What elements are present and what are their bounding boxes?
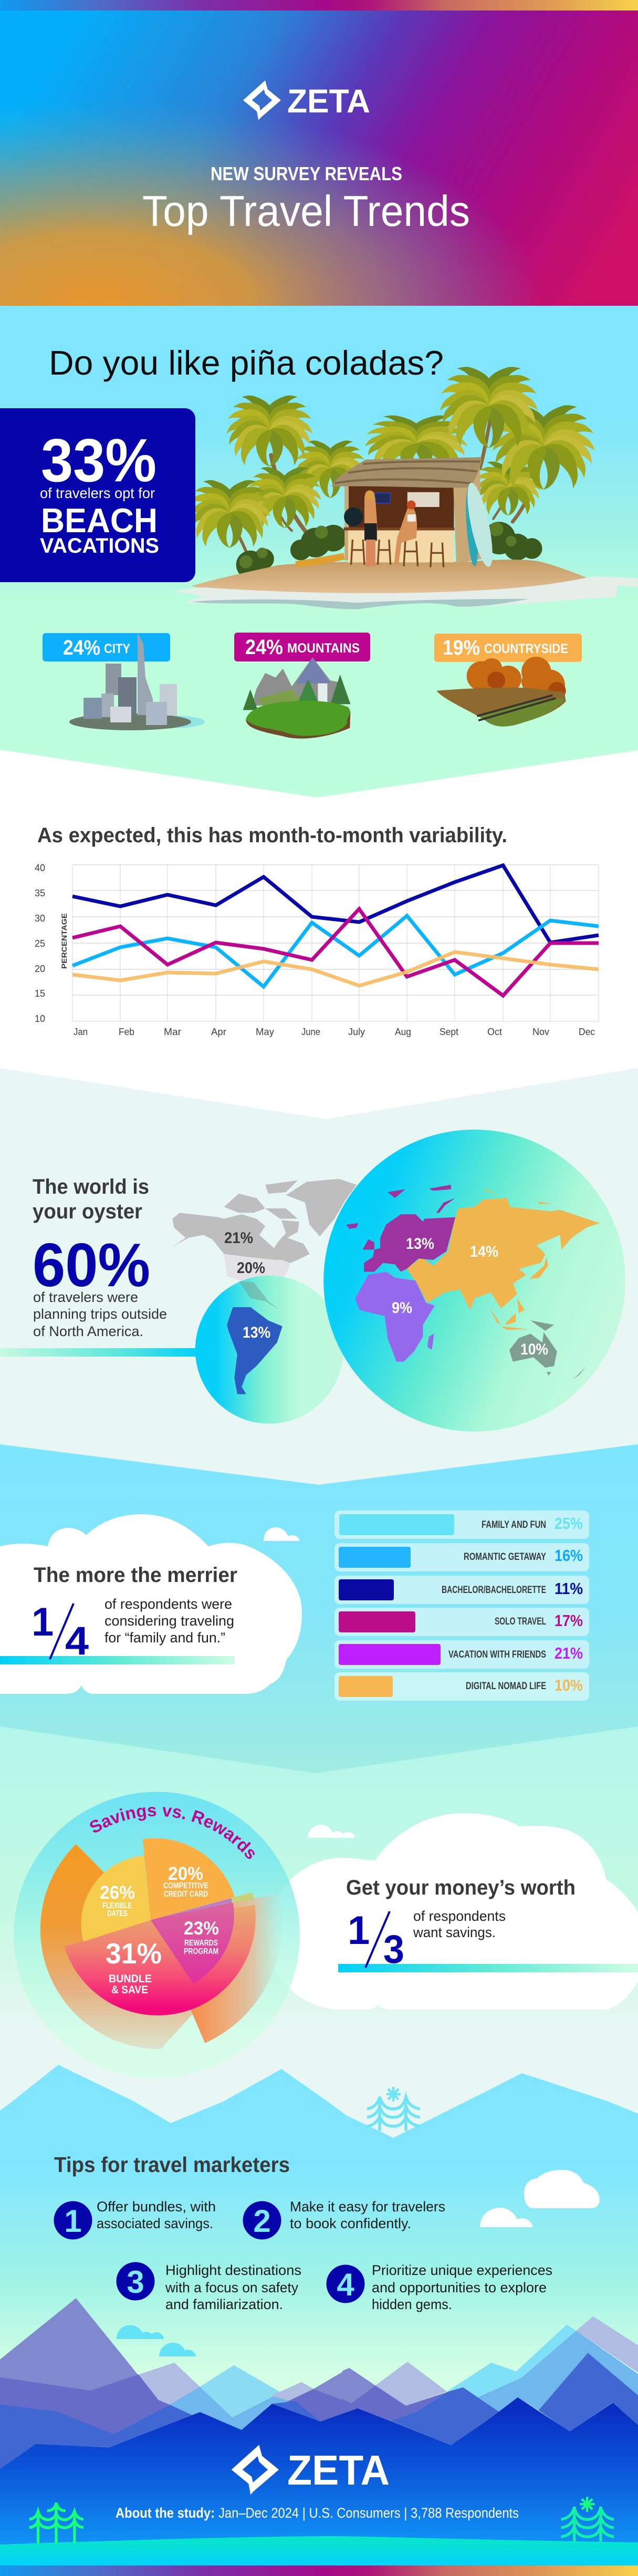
x axis labels: Dec <box>579 1027 595 1037</box>
label 23% rewards program: 23% <box>184 1918 219 1939</box>
foam shadow <box>191 599 529 609</box>
globe: south america <box>195 1276 343 1424</box>
y axis labels: 10 <box>35 1013 45 1024</box>
tip 1 <box>54 2199 216 2239</box>
heading: the world is your oyster: The world is <box>33 1175 149 1198</box>
label asia 14%: 14% <box>470 1243 498 1260</box>
header kicker: NEW SURVEY REVEALS <box>211 163 402 184</box>
merrier caption: for “family and fun.” <box>104 1630 225 1646</box>
panel: world section background <box>0 1068 638 1487</box>
merrier caption <box>104 1596 234 1646</box>
label 31% bundle and save: 31% <box>106 1937 162 1970</box>
badge: countryside: COUNTRYSIDE <box>484 642 568 656</box>
tip 3: 3 <box>127 2264 144 2300</box>
y axis labels <box>35 863 45 1024</box>
row digital nomad life <box>334 1672 589 1701</box>
map: north america <box>172 1179 357 1280</box>
tip 4: 4 <box>337 2267 354 2302</box>
stat caption <box>33 1289 167 1339</box>
fraction one third: 3 <box>383 1927 404 1972</box>
tip 3: Highlight destinations <box>165 2262 301 2278</box>
word beach: BEACH <box>41 501 158 540</box>
tip 1: Offer bundles, with <box>97 2199 216 2215</box>
label 26% flexible dates: DATES <box>107 1909 128 1918</box>
bushes <box>236 522 542 579</box>
chart: savings vs rewards <box>14 1792 300 2078</box>
kayak <box>295 553 344 567</box>
foam <box>173 576 638 609</box>
footer logo: ZETA <box>287 2447 390 2494</box>
asia <box>407 1188 600 1330</box>
badge: city <box>43 633 170 661</box>
fraction one third <box>348 1908 404 1972</box>
stat 60%: 60% <box>33 1230 150 1299</box>
x axis labels: Aug <box>395 1027 411 1037</box>
panel: 33 percent callout <box>0 408 195 582</box>
header panel <box>0 11 638 306</box>
stat 33%: 33% <box>41 426 156 494</box>
bar list: trip types <box>334 1511 589 1701</box>
badge: city: 24% <box>63 636 100 659</box>
fraction one quarter <box>32 1600 89 1663</box>
study note <box>116 2505 519 2521</box>
stat caption: of North America. <box>33 1323 143 1339</box>
heading: month-to-month: As expected, this has month-to-month variability. <box>37 824 507 847</box>
white cloud large <box>524 2170 600 2208</box>
bar counter <box>343 527 455 531</box>
cocktails sign <box>344 508 363 526</box>
row solo travel: 17% <box>555 1611 583 1630</box>
europe <box>347 1185 455 1272</box>
bar side wall <box>453 467 482 564</box>
y axis labels: 40 <box>35 863 45 873</box>
illustration: mountains <box>243 657 350 739</box>
icon: trees left <box>29 2503 83 2543</box>
tip 2: to book confidently. <box>290 2216 411 2231</box>
y axis title: PERCENTAGE <box>60 913 68 969</box>
money caption: want savings. <box>413 1925 496 1940</box>
badge: city: CITY <box>104 642 130 656</box>
x axis labels: Sept <box>440 1027 458 1037</box>
money caption: of respondents <box>413 1908 506 1924</box>
x axis labels: Feb <box>119 1027 134 1037</box>
label 21%: 21% <box>224 1229 253 1247</box>
gradient bar <box>0 1348 197 1357</box>
fraction one quarter: 1 <box>32 1600 54 1644</box>
surfboards <box>462 481 498 568</box>
y axis labels: 30 <box>35 913 45 924</box>
line chart <box>35 863 599 1037</box>
label 31% bundle and save: & SAVE <box>111 1984 148 1996</box>
stat caption: of travelers opt for <box>40 485 155 501</box>
row digital nomad life: DIGITAL NOMAD LIFE <box>466 1681 546 1692</box>
label 20% competitive credit card: 20% <box>168 1864 203 1884</box>
heading: the world is your oyster <box>33 1175 149 1223</box>
white cloud small <box>480 2208 533 2227</box>
row vacation with friends <box>334 1640 589 1669</box>
label 23% rewards program: PROGRAM <box>184 1947 218 1956</box>
label 20% competitive credit card: CREDIT CARD <box>164 1890 208 1899</box>
heading: money's worth: Get your money’s worth <box>346 1876 576 1899</box>
label 26% flexible dates <box>100 1882 135 1918</box>
row digital nomad life: 10% <box>555 1676 583 1694</box>
row romantic getaway: 16% <box>555 1546 583 1565</box>
south america shape <box>227 1307 283 1394</box>
label oceania 10%: 10% <box>520 1341 548 1358</box>
chart title: Savings vs. Rewards <box>90 1807 255 1859</box>
heading: more the merrier: The more the merrier <box>34 1564 237 1587</box>
row solo travel: SOLO TRAVEL <box>495 1616 546 1627</box>
row romantic getaway: ROMANTIC GETAWAY <box>464 1551 546 1563</box>
series: cyan <box>72 916 599 987</box>
row family and fun: FAMILY AND FUN <box>482 1519 546 1530</box>
tip 1: 1 <box>64 2203 82 2239</box>
panel: group travel background <box>0 1444 638 1778</box>
label 13%: 13% <box>243 1324 270 1341</box>
x axis labels: Apr <box>211 1027 226 1037</box>
main title: Top Travel Trends <box>142 187 470 235</box>
stools <box>351 540 444 567</box>
tip 3: and familiarization. <box>165 2296 283 2312</box>
x axis labels: Mar <box>164 1027 181 1037</box>
heading: tips: Tips for travel marketers <box>54 2153 290 2177</box>
tip 2: Make it easy for travelers <box>290 2199 445 2215</box>
study note: Jan–Dec 2024 | U.S. Consumers | 3,788 Respondents <box>218 2505 519 2521</box>
tip 2: 2 <box>253 2203 271 2239</box>
badge: countryside <box>434 634 582 662</box>
bar sign <box>407 492 440 507</box>
bar left post <box>344 486 349 561</box>
heading: pina coladas: Do you like piña coladas? <box>49 344 444 382</box>
top gradient strip <box>0 0 638 11</box>
wedge flexible dates <box>81 1856 151 1941</box>
cloud: money's worth <box>267 1813 638 2010</box>
mountains front <box>0 2397 638 2569</box>
y axis labels: 25 <box>35 938 45 949</box>
badge: countryside: 19% <box>443 636 480 659</box>
panel: savings background <box>0 1726 638 2154</box>
badge: mountains: MOUNTAINS <box>287 641 360 656</box>
row bachelor bachelorette <box>334 1576 589 1604</box>
row bachelor bachelorette: 11% <box>555 1579 583 1598</box>
row vacation with friends: VACATION WITH FRIENDS <box>448 1649 546 1660</box>
icon: trees right <box>561 2497 614 2541</box>
africa <box>355 1272 435 1362</box>
bottom gradient strip <box>0 2565 638 2576</box>
study note: About the study: <box>116 2505 215 2521</box>
label 26% flexible dates: FLEXIBLE <box>102 1901 132 1910</box>
illustration: city <box>69 633 205 730</box>
pie wedges <box>40 1838 282 2049</box>
sand <box>191 560 588 594</box>
mountains right <box>342 2316 638 2445</box>
y axis labels: 35 <box>35 888 45 898</box>
label 20%: 20% <box>237 1259 265 1277</box>
sliver yellow <box>231 1892 254 1903</box>
series: dark blue <box>72 865 599 943</box>
tip 4: and opportunities to explore <box>372 2280 547 2295</box>
bar front <box>348 531 454 562</box>
cyan clouds <box>117 2325 196 2356</box>
footer logo <box>232 2445 390 2495</box>
label 23% rewards program <box>184 1918 219 1956</box>
tip 4: Prioritize unique experiences <box>372 2262 552 2278</box>
icon: pale trees <box>367 2087 420 2131</box>
row solo travel <box>334 1608 589 1636</box>
heading: the world is your oyster: your oyster <box>33 1200 142 1223</box>
money caption <box>413 1908 506 1940</box>
small cloud <box>308 1825 355 1838</box>
man <box>364 490 377 566</box>
woman <box>394 501 417 565</box>
fraction one quarter: 4 <box>65 1619 89 1663</box>
panel: tips background <box>0 2065 638 2469</box>
word vacations: VACATIONS <box>40 534 159 557</box>
x axis labels: June <box>301 1027 320 1037</box>
series: orange <box>72 952 599 986</box>
illustration: beach island <box>173 359 638 609</box>
panel: beach section background <box>0 306 638 798</box>
cloud: the more the merrier <box>0 1514 302 1694</box>
y axis labels: 20 <box>35 964 45 974</box>
stat caption: planning trips outside <box>33 1306 167 1322</box>
x axis labels: Oct <box>487 1027 502 1037</box>
small cloud <box>264 1527 300 1541</box>
wedge outer right <box>151 1894 282 2043</box>
mountains left <box>0 2298 296 2469</box>
gradient bar <box>0 1656 235 1664</box>
badge: mountains <box>234 633 370 661</box>
tip 4 <box>327 2262 552 2312</box>
tip 4: hidden gems. <box>372 2296 452 2312</box>
chart grid <box>72 865 599 1021</box>
label 23% rewards program: REWARDS <box>184 1939 218 1948</box>
palms <box>189 359 595 548</box>
x axis labels: Jan <box>74 1027 88 1037</box>
tip 3: with a focus on safety <box>165 2280 298 2295</box>
gradient bar <box>338 1964 638 1972</box>
overlap slivers <box>161 1898 233 1918</box>
bar back wall <box>347 486 454 529</box>
tip 1: associated savings. <box>97 2216 213 2231</box>
neon sign <box>375 493 390 503</box>
row family and fun: 25% <box>555 1514 583 1533</box>
label 20% competitive credit card: COMPETITIVE <box>163 1881 208 1890</box>
Zeta logo: ZETA <box>287 83 370 120</box>
wedge credit card <box>143 1838 235 1920</box>
row romantic getaway <box>334 1543 589 1571</box>
trunks <box>237 417 541 554</box>
x axis labels: July <box>348 1027 365 1037</box>
tip 3 <box>117 2262 301 2312</box>
row bachelor bachelorette: BACHELOR/BACHELORETTE <box>442 1585 546 1596</box>
wedge outer left <box>40 1844 193 2049</box>
mountains centre <box>271 2368 376 2422</box>
x axis labels: May <box>256 1027 274 1037</box>
label 26% flexible dates: 26% <box>100 1882 135 1903</box>
wedge rewards <box>151 1898 234 1984</box>
label 20% competitive credit card <box>163 1864 208 1899</box>
label 31% bundle and save: BUNDLE <box>109 1973 152 1985</box>
label 31% bundle and save <box>106 1937 162 1996</box>
fraction one third: 1 <box>348 1908 370 1953</box>
ground <box>0 2536 638 2565</box>
illustration: countryside <box>436 657 566 727</box>
central america <box>239 1281 280 1310</box>
x axis labels <box>74 1027 595 1037</box>
x axis labels: Nov <box>532 1027 549 1037</box>
row family and fun <box>334 1511 589 1539</box>
oceania <box>509 1320 587 1379</box>
stat caption: of travelers were <box>33 1289 138 1305</box>
roof <box>332 457 482 488</box>
series: magenta <box>72 909 599 996</box>
tip 2 <box>243 2199 445 2239</box>
badge: mountains: 24% <box>245 636 283 659</box>
label africa 9%: 9% <box>392 1299 412 1317</box>
wedge bundle <box>64 1905 256 2015</box>
row vacation with friends: 21% <box>555 1644 583 1662</box>
merrier caption: of respondents were <box>104 1596 232 1612</box>
label europe 13%: 13% <box>406 1235 434 1253</box>
globe: eastern hemisphere <box>323 1130 625 1432</box>
Zeta logo <box>243 80 370 120</box>
merrier caption: considering traveling <box>104 1613 234 1629</box>
y axis labels: 15 <box>35 988 45 999</box>
